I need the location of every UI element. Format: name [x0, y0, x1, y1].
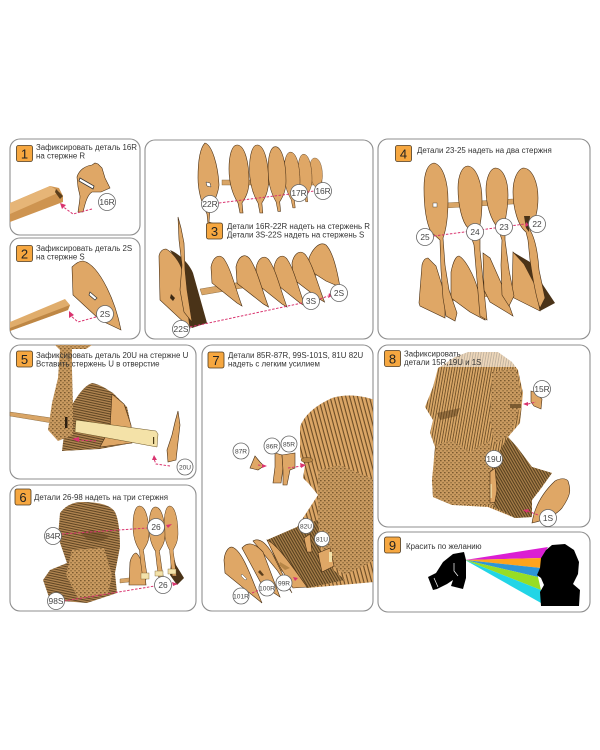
labels: 84R: [45, 531, 61, 541]
step 5 text: Вставить стержень U в отверстие: [36, 360, 160, 368]
bust front: [43, 502, 120, 603]
labels: 86R: [266, 444, 278, 450]
panel 1: fix part 16R: [10, 139, 140, 235]
slot: [65, 417, 68, 428]
face shadow: [80, 530, 110, 541]
labels: 87R: [235, 448, 247, 456]
step badge 8: [384, 350, 400, 366]
labels: 82U: [300, 524, 312, 530]
arrow: [434, 222, 529, 236]
panel 7: parts 85R-87R, 99S-101S, 81U 82U: [202, 345, 375, 611]
step badge 6: [15, 489, 31, 505]
step 4 text: Детали 23-25 надеть на два стержня: [417, 146, 552, 155]
step 8 text: Зафиксировать: [404, 350, 461, 358]
part labels: 24: [470, 227, 480, 237]
rainbow spray: [465, 547, 548, 603]
step 9 text: Красить по желанию: [406, 542, 482, 551]
front fins: [224, 540, 307, 603]
bust back tip: [100, 394, 132, 447]
arrow: [60, 203, 92, 214]
labels lower row: 2S: [334, 288, 345, 298]
arrows: [523, 402, 538, 515]
labels: 26: [158, 580, 168, 590]
labels lower row: [172, 284, 348, 338]
panel 2: fix part 2S: [10, 238, 140, 339]
labels lower row: 22S: [174, 324, 189, 334]
triple parts: [129, 506, 184, 585]
labels upper row: 17R: [291, 188, 307, 198]
lower row of parts: [159, 217, 340, 328]
panel 5: insert rod U: [10, 345, 196, 479]
tall textured part: [48, 345, 92, 441]
step 2 text: на стержне S: [36, 252, 85, 262]
labels: 99R: [278, 580, 290, 588]
part 16R: [77, 163, 110, 212]
step 6 text: Детали 26-98 надеть на три стержня: [34, 493, 168, 502]
icon: hand with spray can: [428, 552, 466, 590]
label 2S: 2S: [100, 309, 111, 319]
step badge 5: [16, 351, 32, 367]
step badge 9: 9: [389, 538, 396, 553]
labels upper row: 22R: [202, 199, 218, 209]
labels: [233, 436, 330, 604]
step badge 2: 2: [21, 246, 28, 262]
step badge 3: [206, 223, 222, 239]
assembled parts: [419, 163, 555, 321]
panel 3: parts 16R-22R and 3S-22S: [145, 140, 373, 339]
arrows: [72, 437, 170, 466]
labels: 98S: [49, 596, 64, 606]
step 2 text: Зафиксировать деталь 2S: [36, 244, 132, 253]
step 3 text: Детали 16R-22R надеть на стержень R: [227, 222, 370, 231]
part labels: 23: [499, 222, 509, 232]
labels: 100R: [259, 586, 275, 592]
panel 9: paint as desired: [378, 532, 590, 612]
labels: [486, 380, 556, 526]
labels: 26: [151, 522, 161, 532]
part 2S: [72, 261, 121, 330]
large bust: [267, 396, 375, 588]
labels: 85R: [283, 442, 295, 448]
arrows: [252, 463, 306, 593]
part labels: 25: [420, 232, 430, 242]
left rod: [10, 412, 52, 423]
step 5 text: Зафиксировать деталь 20U на стержне U: [36, 351, 189, 360]
part 20U: [167, 411, 180, 462]
slot: [510, 404, 521, 408]
labels: [44, 518, 172, 610]
step badge 8: 8: [389, 352, 396, 366]
part 19U: [490, 468, 497, 503]
labels: 19U: [486, 454, 502, 464]
part labels: 22: [532, 219, 542, 229]
bust: [425, 350, 552, 518]
step badge 9: [384, 537, 400, 553]
upper row of parts: [198, 143, 322, 224]
labels upper row: [202, 182, 332, 212]
label 20U: 20U: [179, 464, 191, 472]
labels upper row: 16R: [315, 186, 331, 196]
arrows: [62, 524, 178, 601]
step badge 3: 3: [211, 224, 218, 239]
labels: 81U: [316, 536, 328, 544]
arrow: [69, 311, 96, 322]
step 1 text: на стержне R: [36, 152, 85, 160]
icon: head silhouette: [537, 544, 580, 606]
step 7 text: надеть с легким усилием: [228, 360, 320, 368]
part 15R: [531, 391, 542, 409]
step 7 text: Детали 85R-87R, 99S-101S, 81U 82U: [228, 351, 363, 360]
labels: 101R: [233, 594, 249, 600]
label 20U: [177, 459, 193, 475]
cream rod: [75, 420, 158, 447]
step badge 7: [208, 352, 224, 368]
small parts 81U 82U: [304, 534, 334, 572]
labels: 1S: [543, 513, 554, 523]
panel 4: parts 23-25 on two rods: [378, 139, 590, 339]
part labels: [416, 216, 546, 246]
panel 6: parts 26-98: [10, 485, 196, 611]
arrow lower row: [190, 293, 332, 327]
fin 1S: [532, 479, 570, 523]
beard: [66, 548, 112, 598]
step 3 text: Детали 3S-22S надеть на стержень S: [227, 230, 364, 240]
label 16R: 16R: [99, 197, 115, 207]
step badge 4: 4: [400, 146, 407, 162]
bust back: [62, 383, 132, 451]
step badge 6: 6: [19, 490, 27, 505]
step badge 5: 5: [21, 352, 28, 367]
step badge 1: 1: [21, 146, 28, 162]
wooden rod: [10, 186, 63, 222]
rod: [120, 576, 146, 583]
wooden rod: [10, 299, 70, 331]
step 8 text: детали 15R,19U и 1S: [404, 358, 481, 367]
arrow upper row: [219, 188, 319, 203]
step badge 7: 7: [212, 353, 220, 368]
small parts 85R 86R 87R: [250, 453, 295, 485]
yellow rod ends: [141, 569, 176, 579]
step badge 4: [396, 146, 412, 162]
panel 8: fix parts 15R, 19U, 1S: [378, 345, 590, 527]
labels: 15R: [534, 384, 550, 394]
step 1 text: Зафиксировать деталь 16R: [36, 143, 137, 152]
labels lower row: 3S: [306, 296, 317, 306]
